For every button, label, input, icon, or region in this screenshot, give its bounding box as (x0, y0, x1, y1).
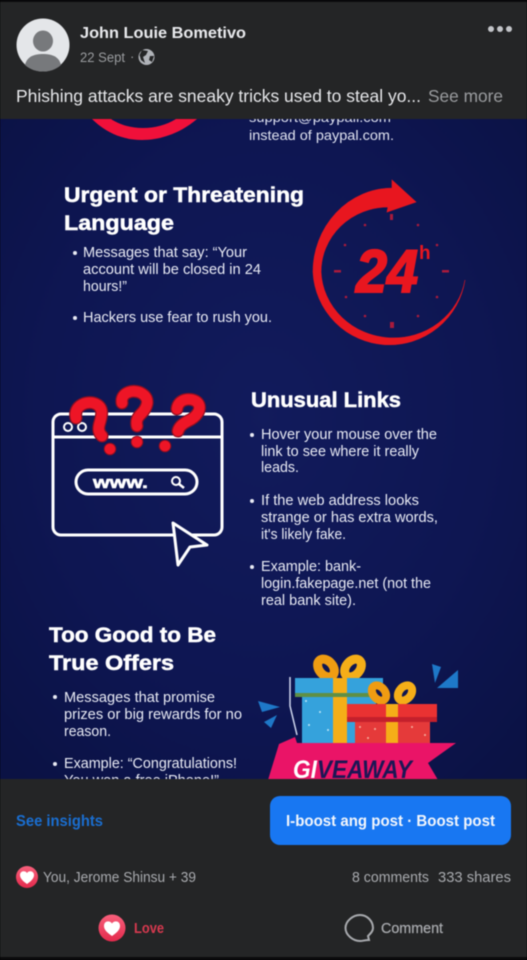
panel: unusual links (53, 388, 438, 609)
text: unusual links bullets: it's likely fake. (261, 527, 346, 543)
icon: 24 hour clock arrow (313, 180, 465, 345)
text: offers bullets (53, 690, 242, 789)
text: post caption: Phishing attacks are sneaky tricks used to steal yo... (16, 86, 421, 106)
text: post caption: See more (428, 86, 503, 106)
text: unusual links bullets: If the web address looks (261, 493, 419, 509)
text: unusual links bullets: leads. (261, 460, 299, 476)
icon: red gift (369, 683, 389, 703)
text: urgent bullets: Messages that say: “Your (83, 245, 247, 261)
panel: infographic background (0, 119, 527, 780)
banner: giveaway ribbon (268, 737, 456, 780)
text: unusual links bullets: real bank site). (261, 593, 356, 609)
heading: urgent language: Urgent or Threatening (64, 183, 304, 207)
icon: sparkles (258, 664, 458, 728)
panel: urgent or threatening language (64, 180, 465, 345)
text: urgent bullets: account will be closed in 24 (83, 262, 261, 278)
heading: too good offers (49, 623, 216, 675)
text: urgent bullets: Hackers use fear to rush you. (83, 310, 272, 326)
icon: browser with question marks: www. (92, 473, 148, 492)
text: post date: 22 Sept (80, 50, 125, 65)
button: boost post (270, 796, 511, 845)
icon: globe (138, 49, 154, 65)
text: offers bullets: reason. (64, 724, 111, 740)
panel: post header: · (130, 49, 134, 64)
text: offers bullets: You won a free iPhone!” (64, 773, 219, 789)
icon: blue gift (290, 677, 297, 735)
text: email example: instead of paypal.com. (249, 127, 394, 143)
text: offers bullets: Example: “Congratulations! (64, 756, 237, 772)
icon: 24 hour clock arrow: 24 (355, 238, 418, 305)
panel: post header (0, 0, 527, 119)
icon: more options (488, 26, 512, 32)
icon: 24 hour clock arrow: h (419, 243, 431, 264)
text: unusual links bullets: Hover your mouse over the (261, 427, 437, 443)
heading: unusual links: Unusual Links (251, 388, 401, 412)
link: see insights: See insights (16, 813, 103, 830)
text: email example: support@paypall.com (249, 109, 391, 125)
button: love: Love (134, 921, 164, 937)
text: author name: John Louie Bometivo (80, 25, 246, 42)
text: email example (249, 109, 394, 143)
icon: small love reaction (16, 866, 38, 888)
text: shares count: 333 shares (438, 870, 511, 886)
panel: post footer (0, 779, 527, 960)
text: unusual links bullets: link to see where it really (261, 444, 420, 460)
icon: browser with question marks (53, 391, 222, 565)
text: comments count: 8 comments (352, 870, 429, 886)
text: unusual links bullets: login.fakepage.net (not the (261, 576, 431, 592)
button: comment: Comment (381, 921, 443, 937)
text: offers bullets: Messages that promise (64, 690, 215, 706)
icon: giveaway gifts (258, 656, 458, 784)
panel: cut-off previous section (92, 109, 394, 143)
heading: too good offers: Too Good to Be (49, 623, 216, 647)
panel: too good to be true offers (49, 623, 458, 789)
icon: giveaway gifts: GIVEAWAY (293, 756, 414, 784)
text: urgent bullets: hours!” (83, 279, 127, 295)
heading: too good offers: True Offers (49, 651, 174, 675)
icon: red circle remnant (92, 119, 197, 140)
button: boost post: I-boost ang post · Boost post (286, 813, 496, 830)
button: love (98, 914, 164, 942)
heading: urgent language (64, 183, 304, 235)
text: unusual links bullets: strange or has extra words, (261, 510, 438, 526)
heading: urgent language: Language (64, 211, 174, 235)
icon: profile avatar (16, 18, 70, 72)
icon: question marks (76, 391, 200, 436)
button: comment (346, 915, 443, 941)
text: unusual links bullets (250, 427, 438, 609)
text: unusual links bullets: Example: bank- (261, 559, 361, 575)
text: reaction names: You, Jerome Shinsu + 39 (43, 870, 196, 886)
text: urgent bullets (73, 245, 272, 326)
text: offers bullets: prizes or big rewards for no (64, 707, 242, 723)
